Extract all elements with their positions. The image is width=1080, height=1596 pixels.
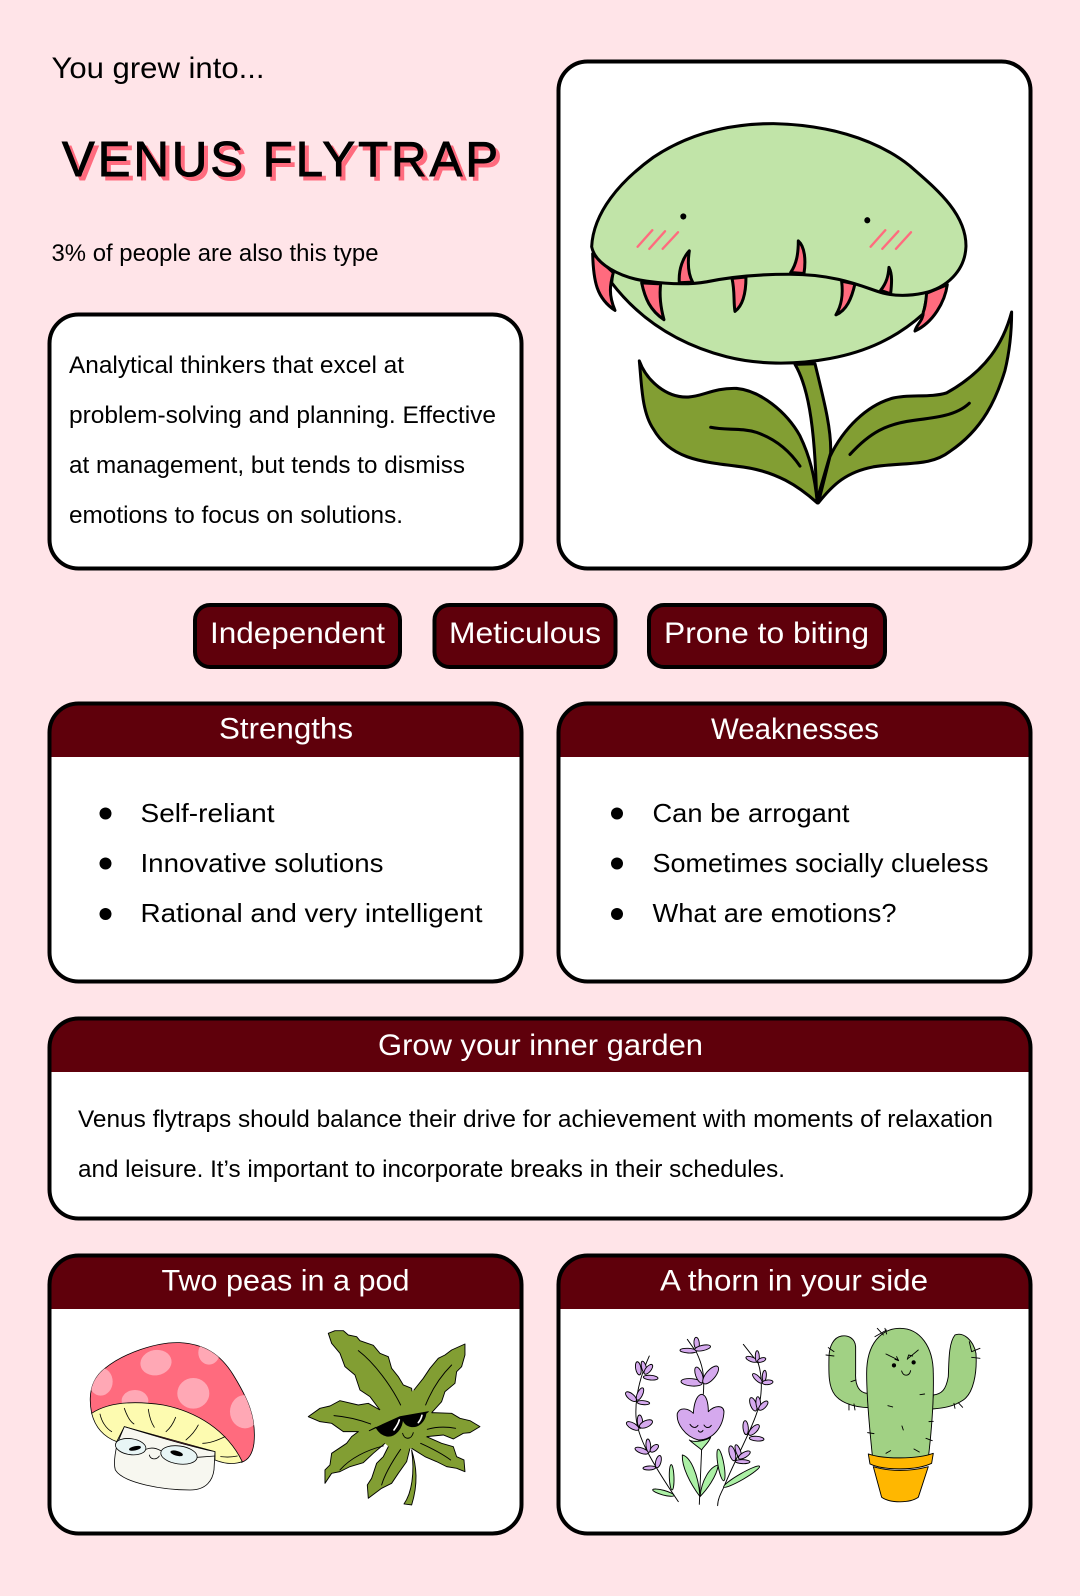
panel: strengths: Strengths: [219, 712, 353, 746]
tag: Independent: Independent: [210, 617, 386, 650]
panel: description: [50, 314, 522, 568]
panel: grow your inner garden: [50, 1018, 1030, 1218]
panel: weaknesses: Can be arrogant: [652, 798, 850, 828]
panel: grow your inner garden: and leisure. It’s important to incorporate breaks in their schedules.: [78, 1156, 785, 1183]
panel: a thorn in your side: [558, 1256, 1030, 1534]
tag: Meticulous: [434, 605, 616, 667]
panel: description: at management, but tends to dismiss: [69, 452, 465, 479]
panel: strengths: [50, 704, 522, 982]
panel: description: problem-solving and planning. Effective: [69, 402, 496, 429]
tag: Independent: [195, 605, 400, 667]
intro line: You grew into...: [52, 52, 264, 85]
tag: Prone to biting: Prone to biting: [664, 617, 869, 650]
panel: weaknesses: Sometimes socially clueless: [652, 848, 988, 878]
percentage text: 3% of people are also this type: [52, 240, 378, 267]
panel: two peas in a pod: Two peas in a pod: [162, 1264, 410, 1298]
panel: weaknesses: What are emotions?: [652, 898, 896, 928]
icon: cactus: [826, 1328, 980, 1502]
panel: strengths: Innovative solutions: [140, 848, 384, 878]
panel: strengths: Self-reliant: [140, 798, 275, 828]
title: Venus Flytrap: VENUS FLYTRAP: [66, 137, 502, 191]
tag: Meticulous: Meticulous: [449, 617, 601, 650]
panel: two peas in a pod: [50, 1256, 522, 1534]
icon: leaf with sunglasses: [308, 1331, 480, 1505]
panel: weaknesses: Weaknesses: [711, 713, 879, 746]
panel: grow your inner garden: Venus flytraps should balance their drive for achievement with moments of relaxation: [78, 1106, 993, 1133]
title: Venus Flytrap: VENUS FLYTRAP: [62, 133, 498, 187]
panel: description: emotions to focus on solutions.: [69, 502, 403, 529]
panel: description: Analytical thinkers that excel at: [69, 352, 404, 379]
icon: lavender: [624, 1337, 773, 1506]
panel: weaknesses: [558, 704, 1030, 982]
panel: grow your inner garden: Grow your inner garden: [378, 1029, 703, 1062]
panel: venus flytrap illustration: [558, 62, 1030, 568]
icon: venus flytrap plant: [592, 124, 1012, 503]
panel: strengths: Rational and very intelligent: [140, 898, 483, 928]
panel: a thorn in your side: A thorn in your side: [660, 1264, 928, 1298]
icon: mushroom: [89, 1341, 260, 1490]
tag: Prone to biting: [649, 605, 885, 667]
